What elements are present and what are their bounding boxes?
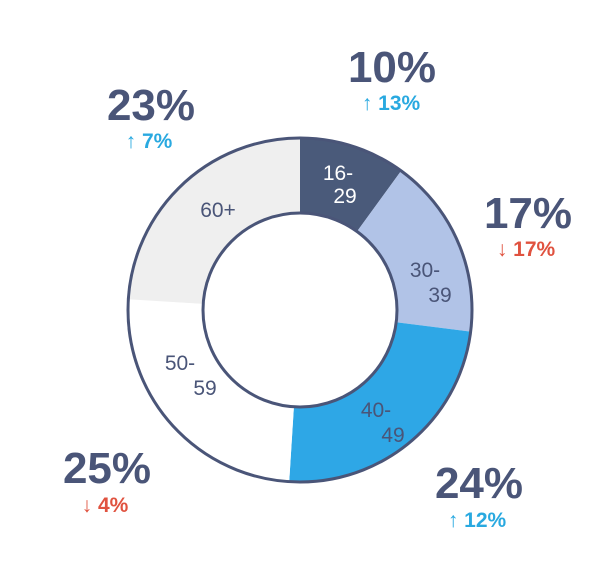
segment: 16-29 bbox=[300, 138, 401, 232]
segment: 30-39 bbox=[357, 171, 472, 332]
segment labels bbox=[165, 162, 452, 447]
callout: 25%: ↓ 4% bbox=[82, 494, 129, 517]
segment: 60+ bbox=[128, 138, 300, 304]
segment labels: 49 bbox=[381, 424, 405, 447]
segment labels: 59 bbox=[193, 377, 217, 400]
callout: 25% bbox=[63, 444, 151, 517]
callout: 17% bbox=[484, 189, 572, 261]
callout: 17%: ↓ 17% bbox=[497, 238, 556, 261]
callout: 10%: ↑ 13% bbox=[362, 92, 421, 115]
donut chart bbox=[128, 138, 472, 482]
segment labels: 40- bbox=[361, 399, 391, 422]
segment: 40-49 bbox=[289, 322, 471, 482]
callout: 17%: 17% bbox=[484, 189, 572, 238]
segment labels: 16- bbox=[323, 162, 353, 185]
callout: 25%: 25% bbox=[63, 444, 151, 493]
callout: 10%: 10% bbox=[348, 43, 436, 92]
segment labels: 50- bbox=[165, 352, 195, 375]
segment labels: 39 bbox=[428, 284, 452, 307]
callout: 10% bbox=[348, 43, 436, 115]
callout: 24% bbox=[435, 459, 523, 532]
callout: 23% bbox=[107, 81, 195, 153]
segment labels: 29 bbox=[333, 185, 357, 208]
segment labels: 30- bbox=[410, 259, 440, 282]
callout: 24%: 24% bbox=[435, 459, 523, 508]
callout: 24%: ↑ 12% bbox=[448, 509, 507, 532]
segment: 50-59 bbox=[128, 299, 294, 482]
callout: 23%: 23% bbox=[107, 81, 195, 130]
callout: 23%: ↑ 7% bbox=[126, 130, 173, 153]
segment labels: 60+ bbox=[200, 199, 236, 222]
